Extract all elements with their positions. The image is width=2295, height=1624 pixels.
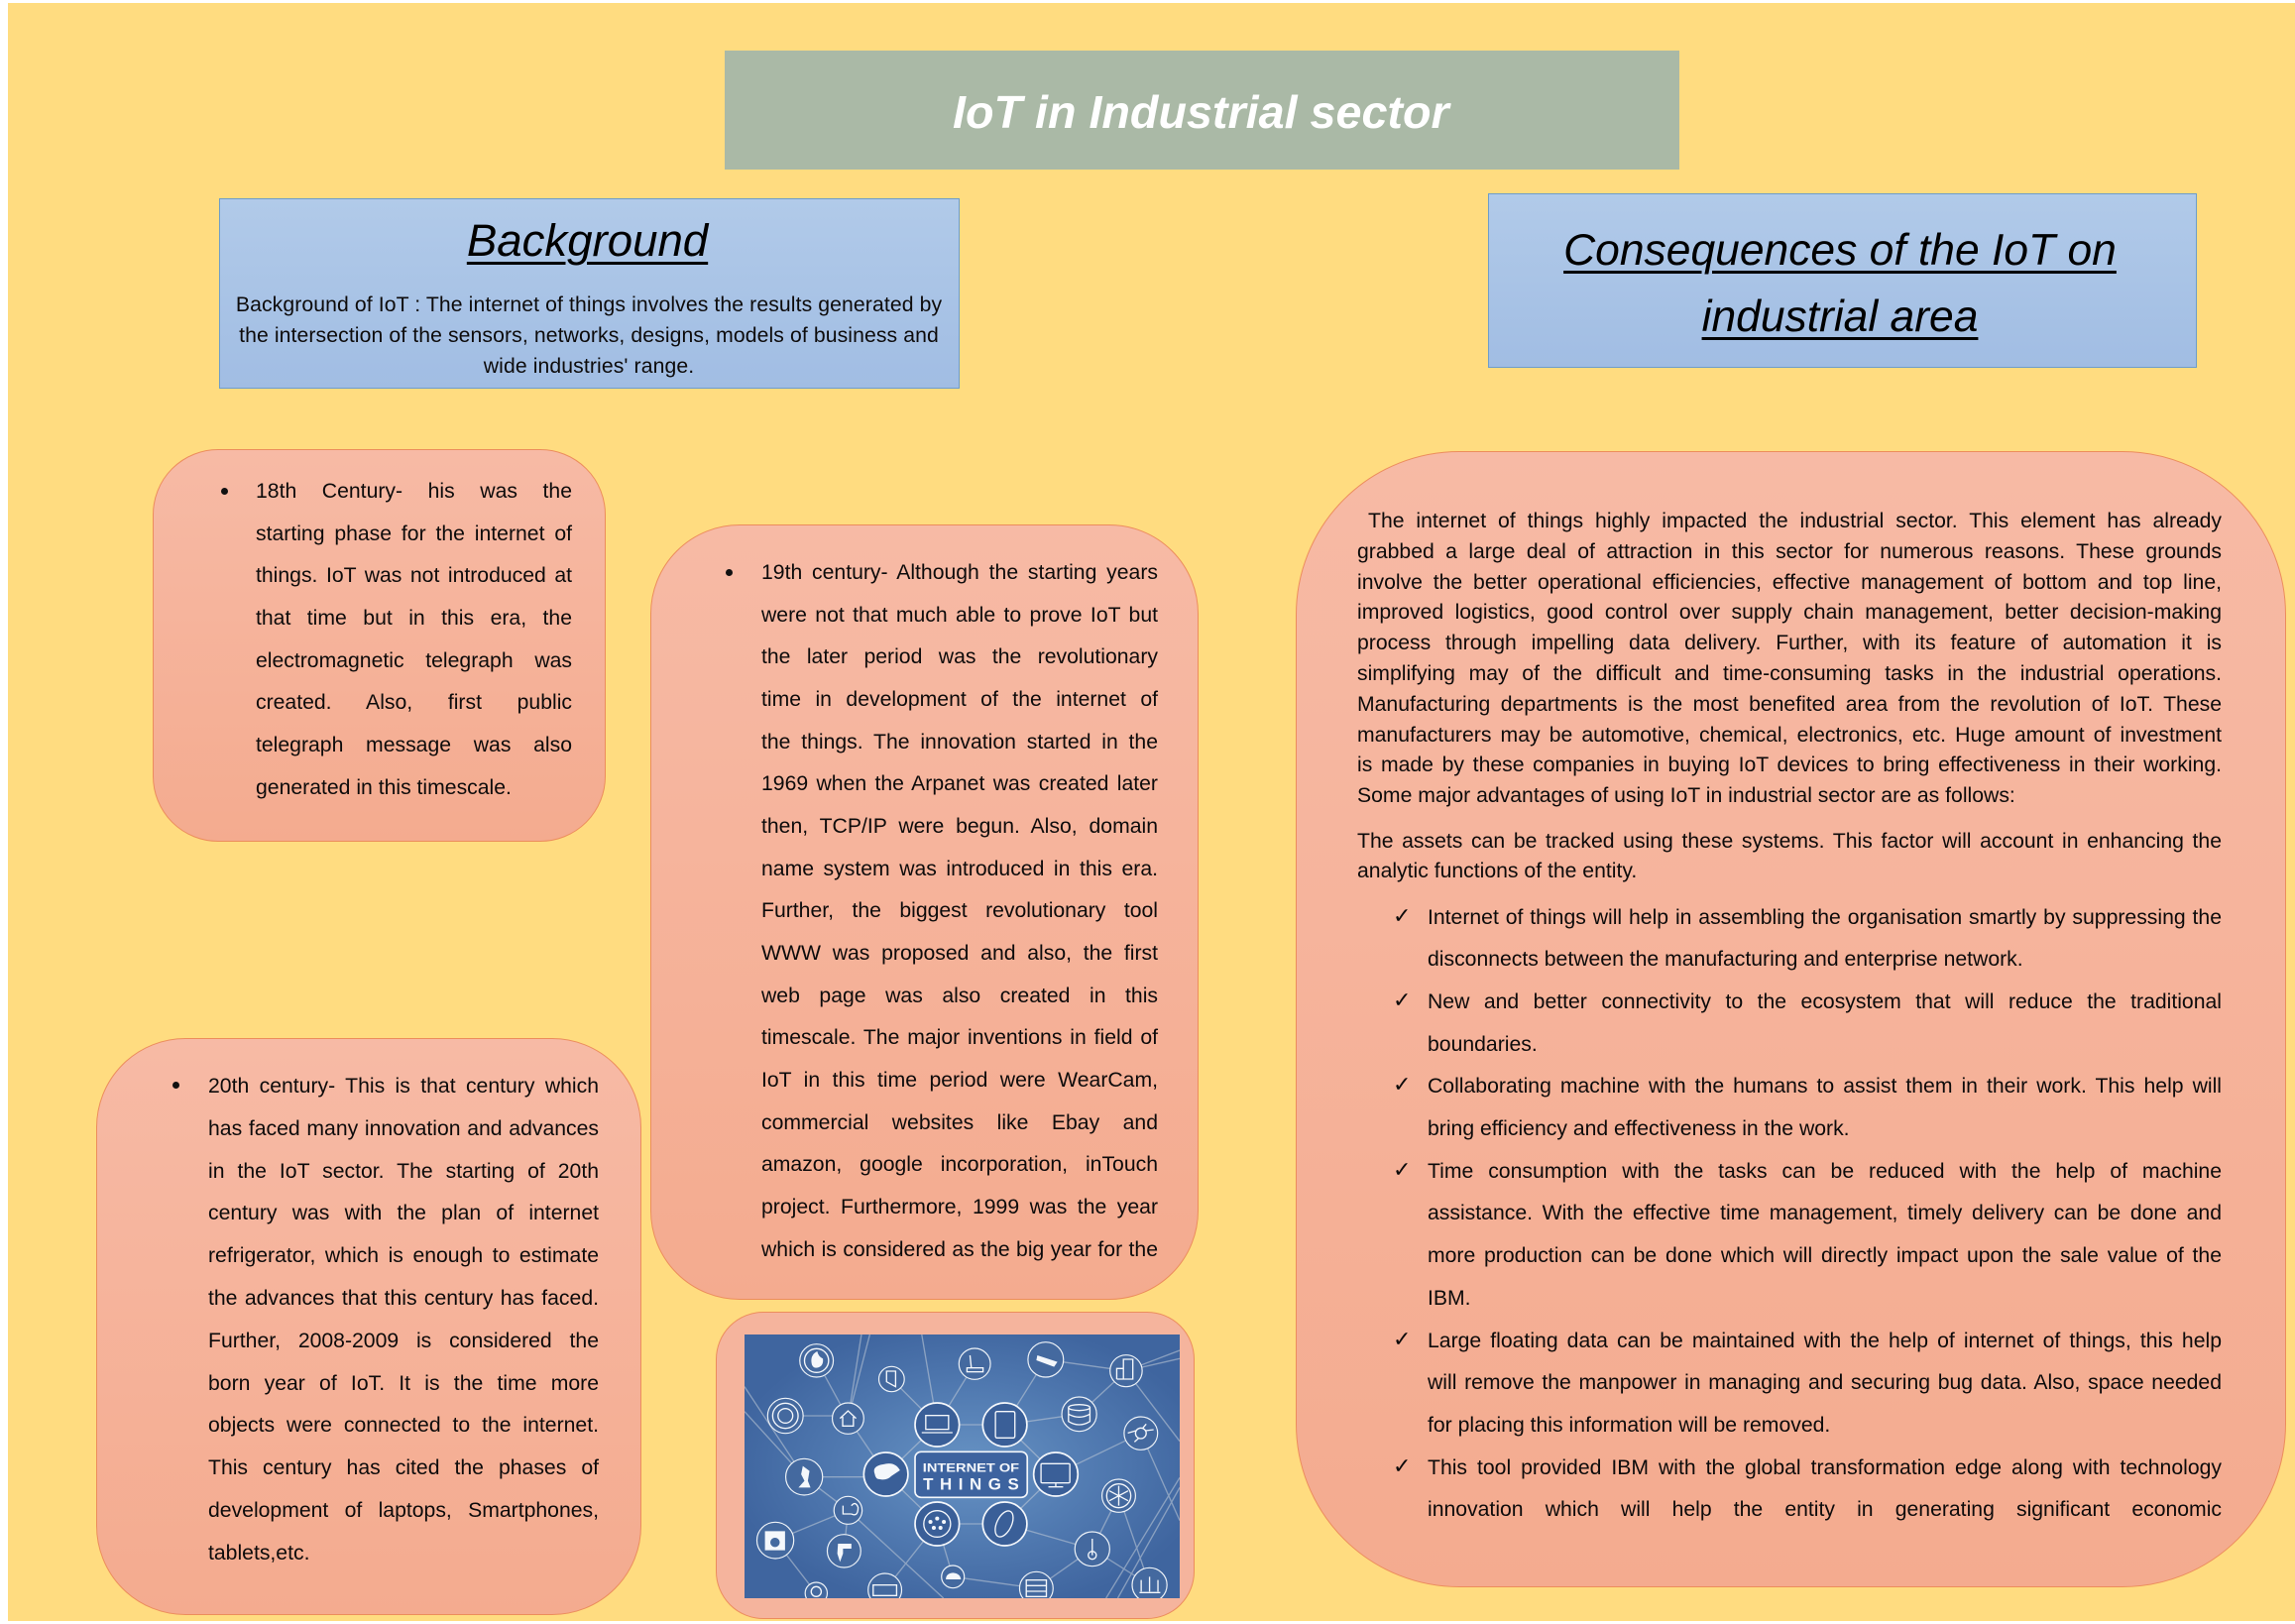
20th century text: in the IoT sector. The starting of 20th xyxy=(208,1160,599,1183)
background description text: Background of IoT : The internet of things involves the results generated by xyxy=(236,293,942,315)
image: Internet of Things network diagram xyxy=(745,1334,1180,1598)
20th century text xyxy=(208,1075,599,1565)
19th century text: commercial websites like Ebay and xyxy=(761,1111,1158,1134)
background description text: wide industries' range. xyxy=(484,355,694,377)
advantage: collaboration: bring efficiency and effectiveness in the work. xyxy=(1428,1117,1850,1140)
advantage: floating data: will remove the manpower in managing and securing bug data. Also, space needed xyxy=(1428,1371,2222,1394)
intro paragraph: is made by these companies in buying IoT devices to bring effectiveness in their working. xyxy=(1357,754,2222,776)
advantage: smart assembly: Internet of things will help in assembling the organisation smartly by suppressing the xyxy=(1428,906,2222,928)
19th century text: IoT in this time period were WearCam, xyxy=(761,1069,1158,1092)
19th century text: name system was introduced in this era. xyxy=(761,858,1158,880)
18th century text: electromagnetic telegraph was xyxy=(256,649,572,672)
19th century text: project. Furthermore, 1999 was the year xyxy=(761,1196,1158,1218)
18th century text: generated in this timescale. xyxy=(256,776,512,799)
intro paragraph: Manufacturing departments is the most benefited area from the revolution of IoT. These xyxy=(1357,693,2222,716)
19th century text: web page was also created in this xyxy=(761,985,1158,1007)
advantage: smart assembly: disconnects between the manufacturing and enterprise network. xyxy=(1428,948,2023,971)
18th century text: created. Also, first public xyxy=(256,691,572,714)
20th century text: objects were connected to the internet. xyxy=(208,1414,599,1437)
19th century text: the later period was the revolutionary xyxy=(761,645,1158,668)
18th century text: starting phase for the internet of xyxy=(256,522,572,545)
panel: consequences content: ✓ xyxy=(1393,904,1411,928)
title banner xyxy=(725,51,1679,170)
advantage: time consumption: Time consumption with the tasks can be reduced with the help of machine xyxy=(1428,1160,2222,1183)
20th century text: refrigerator, which is enough to estimate xyxy=(208,1244,599,1267)
intro paragraph: involve the better operational efficiencies, effective management of bottom and top line, xyxy=(1357,571,2222,594)
panel: consequences content: ✓ xyxy=(1393,1158,1411,1183)
19th century text: 19th century- Although the starting years xyxy=(761,561,1158,584)
intro paragraph: grabbed a large deal of attraction in this sector for numerous reasons. These grounds xyxy=(1357,540,2222,563)
panel: consequences content: ✓ xyxy=(1393,1073,1411,1098)
panel: consequences content: ✓ xyxy=(1393,988,1411,1013)
center label: Internet of Things: INTERNET OF xyxy=(923,1460,1019,1474)
advantage: connectivity: boundaries. xyxy=(1428,1033,1538,1056)
center label: Internet of Things: THINGS xyxy=(923,1474,1019,1493)
bullet xyxy=(726,569,733,576)
18th century text: telegraph message was also xyxy=(256,734,572,756)
19th century text: Further, the biggest revolutionary tool xyxy=(761,899,1158,922)
advantage: floating data: Large floating data can be maintained with the help of internet of things, this help xyxy=(1428,1330,2222,1352)
panel: consequences heading box xyxy=(1488,193,2197,368)
intro paragraph xyxy=(1357,510,2222,807)
advantage: transformation edge: innovation which will help the entity in generating significant economic xyxy=(1428,1498,2222,1521)
advantage: transformation edge xyxy=(1393,1454,2222,1521)
panel: 19th century xyxy=(650,524,1199,1300)
18th century text: 18th Century- his was the xyxy=(256,480,572,503)
large nodes xyxy=(863,1403,1078,1546)
background description text: the intersection of the sensors, networks, designs, models of business and xyxy=(239,323,939,347)
intro paragraph: manufacturers may be automotive, chemical, electronics, etc. Huge amount of investment xyxy=(1357,724,2222,747)
heading: Consequences of the IoT on industrial area: industrial area xyxy=(1702,292,1978,341)
20th century text: 20th century- This is that century which xyxy=(208,1075,599,1098)
advantage: collaboration xyxy=(1393,1073,2222,1140)
advantage: floating data xyxy=(1393,1328,2222,1437)
node icons xyxy=(772,1348,1160,1596)
advantage: connectivity xyxy=(1393,988,2222,1056)
bullet xyxy=(221,488,228,495)
20th century text: the advances that this century has faced. xyxy=(208,1287,599,1310)
intro paragraph: improved logistics, good control over supply chain management, better decision-making xyxy=(1357,601,2222,624)
20th century text: has faced many innovation and advances xyxy=(208,1117,599,1140)
checklist of advantages xyxy=(1393,904,2222,1521)
20th century text: Further, 2008-2009 is considered the xyxy=(208,1330,599,1352)
18th century text: things. IoT was not introduced at xyxy=(256,564,572,587)
small nodes xyxy=(757,1342,1167,1606)
advantage: time consumption: assistance. With the effective time management, timely delivery can be done and xyxy=(1428,1202,2222,1224)
20th century text: century was with the plan of internet xyxy=(208,1202,599,1224)
18th century text xyxy=(256,480,573,799)
intro paragraph: process through impelling data delivery. Further, with its feature of automation it is xyxy=(1357,632,2222,654)
background description text xyxy=(236,293,942,377)
bullet xyxy=(172,1082,179,1089)
18th century text: that time but in this era, the xyxy=(256,607,572,630)
19th century text: 1969 when the Arpanet was created later xyxy=(761,772,1158,795)
advantage: time consumption xyxy=(1393,1158,2222,1310)
advantage: connectivity: New and better connectivity to the ecosystem that will reduce the traditional xyxy=(1428,990,2222,1013)
panel: image frame xyxy=(716,1312,1195,1619)
center label: Internet of Things xyxy=(915,1451,1027,1497)
advantage: time consumption: more production can be done which will directly impact upon the sale value of the xyxy=(1428,1244,2222,1267)
intro paragraph: simplifying may of the difficult and time-consuming tasks in the industrial operations. xyxy=(1357,662,2222,685)
advantage: smart assembly xyxy=(1393,904,2222,971)
intro paragraph: Some major advantages of using IoT in industrial sector are as follows: xyxy=(1357,784,2015,807)
panel: background heading box xyxy=(219,198,960,389)
assets paragraph: The assets can be tracked using these systems. This factor will account in enhancing the xyxy=(1357,829,2222,853)
20th century text: tablets,etc. xyxy=(208,1542,309,1565)
heading: Consequences of the IoT on industrial area xyxy=(1563,226,2117,341)
19th century text: the things. The innovation started in the xyxy=(761,731,1158,754)
advantage: time consumption: IBM. xyxy=(1428,1287,1471,1310)
20th century text: born year of IoT. It is the time more xyxy=(208,1372,599,1395)
advantage: transformation edge: This tool provided IBM with the global transformation edge along with technology xyxy=(1428,1456,2222,1479)
panel: consequences content xyxy=(1296,451,2286,1587)
19th century text: then, TCP/IP were begun. Also, domain xyxy=(761,815,1158,838)
19th century text: time in development of the internet of xyxy=(761,688,1158,711)
19th century text: amazon, google incorporation, inTouch xyxy=(761,1153,1158,1176)
panel: 20th century xyxy=(96,1038,641,1615)
panel: consequences content: ✓ xyxy=(1393,1454,1411,1479)
assets paragraph: analytic functions of the entity. xyxy=(1357,859,1637,882)
assets paragraph xyxy=(1357,829,2222,882)
intro paragraph: The internet of things highly impacted the industrial sector. This element has already xyxy=(1368,510,2222,532)
19th century text: which is considered as the big year for the xyxy=(761,1237,1158,1261)
title text: IoT in Industrial sector xyxy=(953,86,1449,138)
panel: 18th century xyxy=(153,449,606,842)
heading: Background: Background xyxy=(467,215,708,266)
19th century text: timescale. The major inventions in field of xyxy=(761,1026,1158,1049)
heading: Consequences of the IoT on industrial area: Consequences of the IoT on xyxy=(1563,226,2117,275)
20th century text: This century has cited the phases of xyxy=(208,1456,599,1479)
panel: consequences content: ✓ xyxy=(1393,1328,1411,1352)
advantage: floating data: for placing this information will be removed. xyxy=(1428,1414,1830,1437)
19th century text: WWW was proposed and also, the first xyxy=(761,942,1158,965)
20th century text: development of laptops, Smartphones, xyxy=(208,1499,599,1522)
19th century text: were not that much able to prove IoT but xyxy=(761,604,1158,627)
advantage: collaboration: Collaborating machine with the humans to assist them in their work. This help will xyxy=(1428,1075,2222,1098)
19th century text xyxy=(761,561,1158,1261)
